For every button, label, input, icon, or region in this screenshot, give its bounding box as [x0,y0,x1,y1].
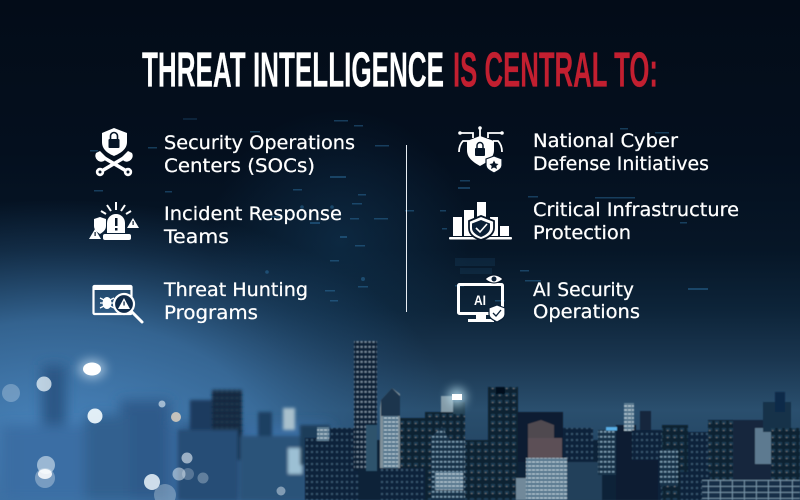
item: Incident Response Teams [89,202,342,248]
label: Operations [533,301,640,323]
icon: AI monitor with eye and shield [458,275,505,322]
title: THREAT INTELLIGENCE [142,44,444,98]
label: Security Operations [164,132,355,154]
label: Defense Initiatives [533,153,709,175]
background: floating data particles [90,118,708,302]
background: soft mid skyline [178,390,330,500]
icon: shield lock with crossed wrenches [95,128,133,176]
item: Threat Hunting Programs [93,279,308,324]
icon: AI monitor with eye and shield: AI [474,292,486,308]
icon: browser window with bug and magnifier [93,286,142,322]
label: Protection [533,222,631,244]
label [163,279,308,324]
label: National Cyber [533,130,678,152]
item: Security Operations Centers [95,128,355,177]
label: Critical Infrastructure [533,199,739,221]
label: Programs [164,302,258,324]
item: National Cyber Defense Initiatives [458,126,709,175]
label: AI Security [533,279,634,301]
label [533,199,739,244]
label: Incident Response [164,203,342,225]
background: city light bokeh [2,359,466,500]
label [533,279,640,323]
background: blurred left skyline [0,365,330,500]
background: sharp right skyline [305,341,800,500]
icon: shield lock with circuit lines and star badge [458,126,504,173]
label [163,203,342,248]
label: Centers (SOCs) [164,155,315,177]
label: Threat Hunting [163,279,308,301]
item: Critical Infrastructure Protection [449,199,739,244]
label [164,132,355,177]
icon: buildings with shield check [449,202,512,240]
label [533,130,709,175]
icon: siren with warning triangles [89,202,139,240]
divider line [406,145,407,312]
item: AI Security Operations [458,275,640,323]
label: Teams [163,226,229,248]
